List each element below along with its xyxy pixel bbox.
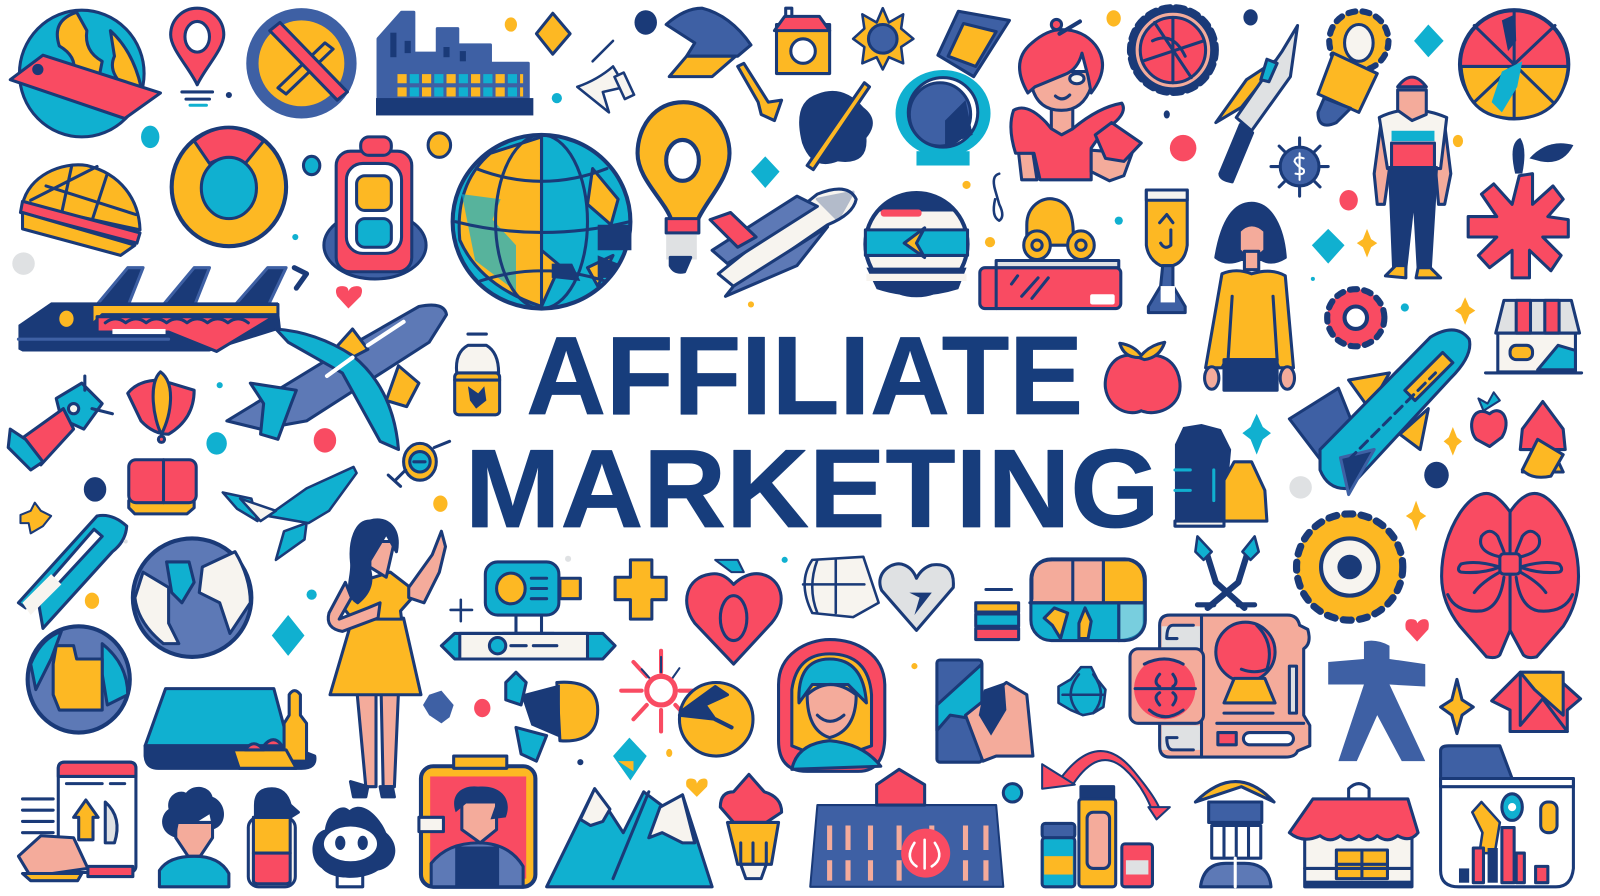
icon: blue world globe: [133, 538, 251, 657]
decorative yellow heart: [686, 779, 708, 797]
icon: yellow box with house lid: [774, 8, 830, 74]
icon: backpack: [324, 137, 426, 279]
icon: red folder box: [129, 460, 196, 514]
icon: heart apple face: [687, 560, 781, 664]
icon: mountains: [547, 789, 712, 887]
icon: browser window chart: [1441, 746, 1573, 887]
icon: sun: [853, 8, 913, 69]
icon: teal x clasp: [1195, 536, 1259, 608]
icon: prohibition sign: [252, 14, 350, 112]
icon: butterfly: [20, 503, 51, 533]
icon: red and yellow bag: [1520, 402, 1565, 477]
icon: storefront: [1486, 300, 1582, 373]
icon: big airplane: [227, 305, 447, 450]
small decorative dots mid: [748, 181, 1123, 308]
decorative dots centre lower: [124, 539, 917, 765]
icon: yellow clock gauge: [388, 441, 450, 486]
icon: rocket pen: [1216, 26, 1298, 182]
icon: teal diamond with sparkle: [1312, 229, 1475, 325]
icon: vest and bag: [1175, 424, 1267, 526]
icon: red heart: [336, 286, 362, 309]
title: [465, 313, 1160, 551]
icon: folded red shirt: [1492, 672, 1581, 732]
decorative sparkle and gray dot: [1242, 414, 1462, 531]
icon: white globe small: [803, 557, 879, 617]
icon: tent with bottle and fruit basket: [145, 689, 315, 768]
icon: gray heart: [880, 564, 953, 630]
icon: globe with yellow patch: [28, 626, 130, 733]
icon: bottle: [455, 334, 500, 415]
icon: donut chart: [172, 128, 286, 246]
icon: small apple: [1472, 392, 1506, 446]
icon: red-haired girl: [1011, 19, 1141, 181]
icon: photo frame person: [419, 756, 535, 887]
icon: red gift brain: [1442, 493, 1579, 658]
icon: microphone podium: [1195, 782, 1274, 887]
decorative dots left middle: [84, 382, 448, 609]
icon: stack of books: [976, 590, 1019, 640]
icon: yellow gear: [1297, 514, 1403, 620]
icon: standing man: [1374, 77, 1451, 278]
icon: map pin: [171, 8, 232, 105]
icon: small teal airplane: [223, 467, 357, 560]
icon: satellite: [577, 41, 634, 112]
icon: yellow pie clock: [679, 682, 753, 756]
icon: small teal cloud: [423, 691, 454, 723]
icon: curly-haired boy: [159, 787, 229, 887]
icon: striped circle: [865, 193, 968, 296]
icon: large world globe: [453, 135, 631, 309]
decorative dots and quote mark: [303, 133, 451, 175]
icon: wrench: [738, 63, 782, 121]
icon: curved red arrow: [1042, 751, 1170, 819]
icon: gear with red globe: [1131, 8, 1215, 92]
icon: yellow cross: [615, 560, 666, 619]
icon: cloud with yellow pin: [799, 83, 873, 170]
icon: yellow knit hat: [20, 165, 140, 255]
icon: product bottles: [1042, 787, 1152, 887]
icon: fluffy sheep: [312, 807, 395, 887]
icon: small red and teal plane: [8, 376, 112, 470]
icon: dollar virus: [1271, 138, 1328, 196]
icon: retro device with apple: [1130, 615, 1310, 757]
icon: light bulb pin: [638, 102, 730, 272]
decorative teal dot: [1003, 784, 1022, 802]
icon: woman in yellow dress: [328, 520, 445, 797]
icon: globe with red tag: [10, 10, 160, 137]
title: MARKETING: [465, 426, 1160, 551]
icon: teal yellow diamond: [613, 738, 647, 781]
icon: teal diamond small: [751, 156, 780, 188]
icon: chain clip: [994, 174, 1002, 221]
icon: yellow star: [1441, 679, 1473, 734]
icon: projector machine: [441, 562, 615, 659]
icon: camera lens: [506, 672, 598, 761]
icon: ice cream bulb: [720, 774, 782, 879]
icon: yellow gear with microphone: [1318, 11, 1388, 125]
icon: blue surfboard rocket: [1289, 330, 1470, 494]
icon: blue T figure: [1328, 641, 1425, 761]
icon: colour palette panel: [1030, 559, 1145, 641]
icon: tablet chart: [18, 762, 136, 881]
icon: factory building: [376, 12, 533, 115]
decorative red heart right: [1405, 619, 1429, 642]
icon: avatar in arch: [779, 640, 885, 771]
title: AFFILIATE: [526, 313, 1083, 438]
icon: market stall: [1289, 784, 1418, 887]
icon: yellow diamond: [536, 13, 570, 54]
decorative dots upper centre: [12, 10, 657, 275]
icon: small red plus: [451, 600, 472, 621]
icon: red star apple: [1468, 138, 1573, 278]
icon: space shuttle: [710, 189, 856, 296]
icon: fan shell: [128, 372, 194, 442]
icon: school building: [810, 769, 1003, 887]
icon: woman in yellow sweater: [1205, 203, 1294, 390]
icon: train: [18, 268, 307, 351]
icon: teal flower globe: [1058, 667, 1105, 715]
icon: blue helmet: [666, 8, 751, 77]
icon: champagne glass: [1146, 190, 1187, 313]
icon: wallet with coins: [980, 199, 1121, 309]
icon: tilted phone: [938, 11, 1009, 77]
icon: segmented wheel: [1460, 10, 1568, 119]
decorative dots right column: [1106, 9, 1463, 312]
icon: water bottle with cap: [248, 789, 298, 887]
icon: red sunburst: [621, 651, 700, 732]
icon: tube clip: [18, 515, 127, 628]
icon: red gear: [1327, 289, 1384, 346]
icon: red apple: [1105, 342, 1180, 413]
icon: teal diamond: [1414, 25, 1444, 57]
icon: hand holding phone: [937, 660, 1033, 762]
icon: teal diamond: [272, 615, 304, 656]
icon: teal globe orb: [897, 72, 989, 166]
